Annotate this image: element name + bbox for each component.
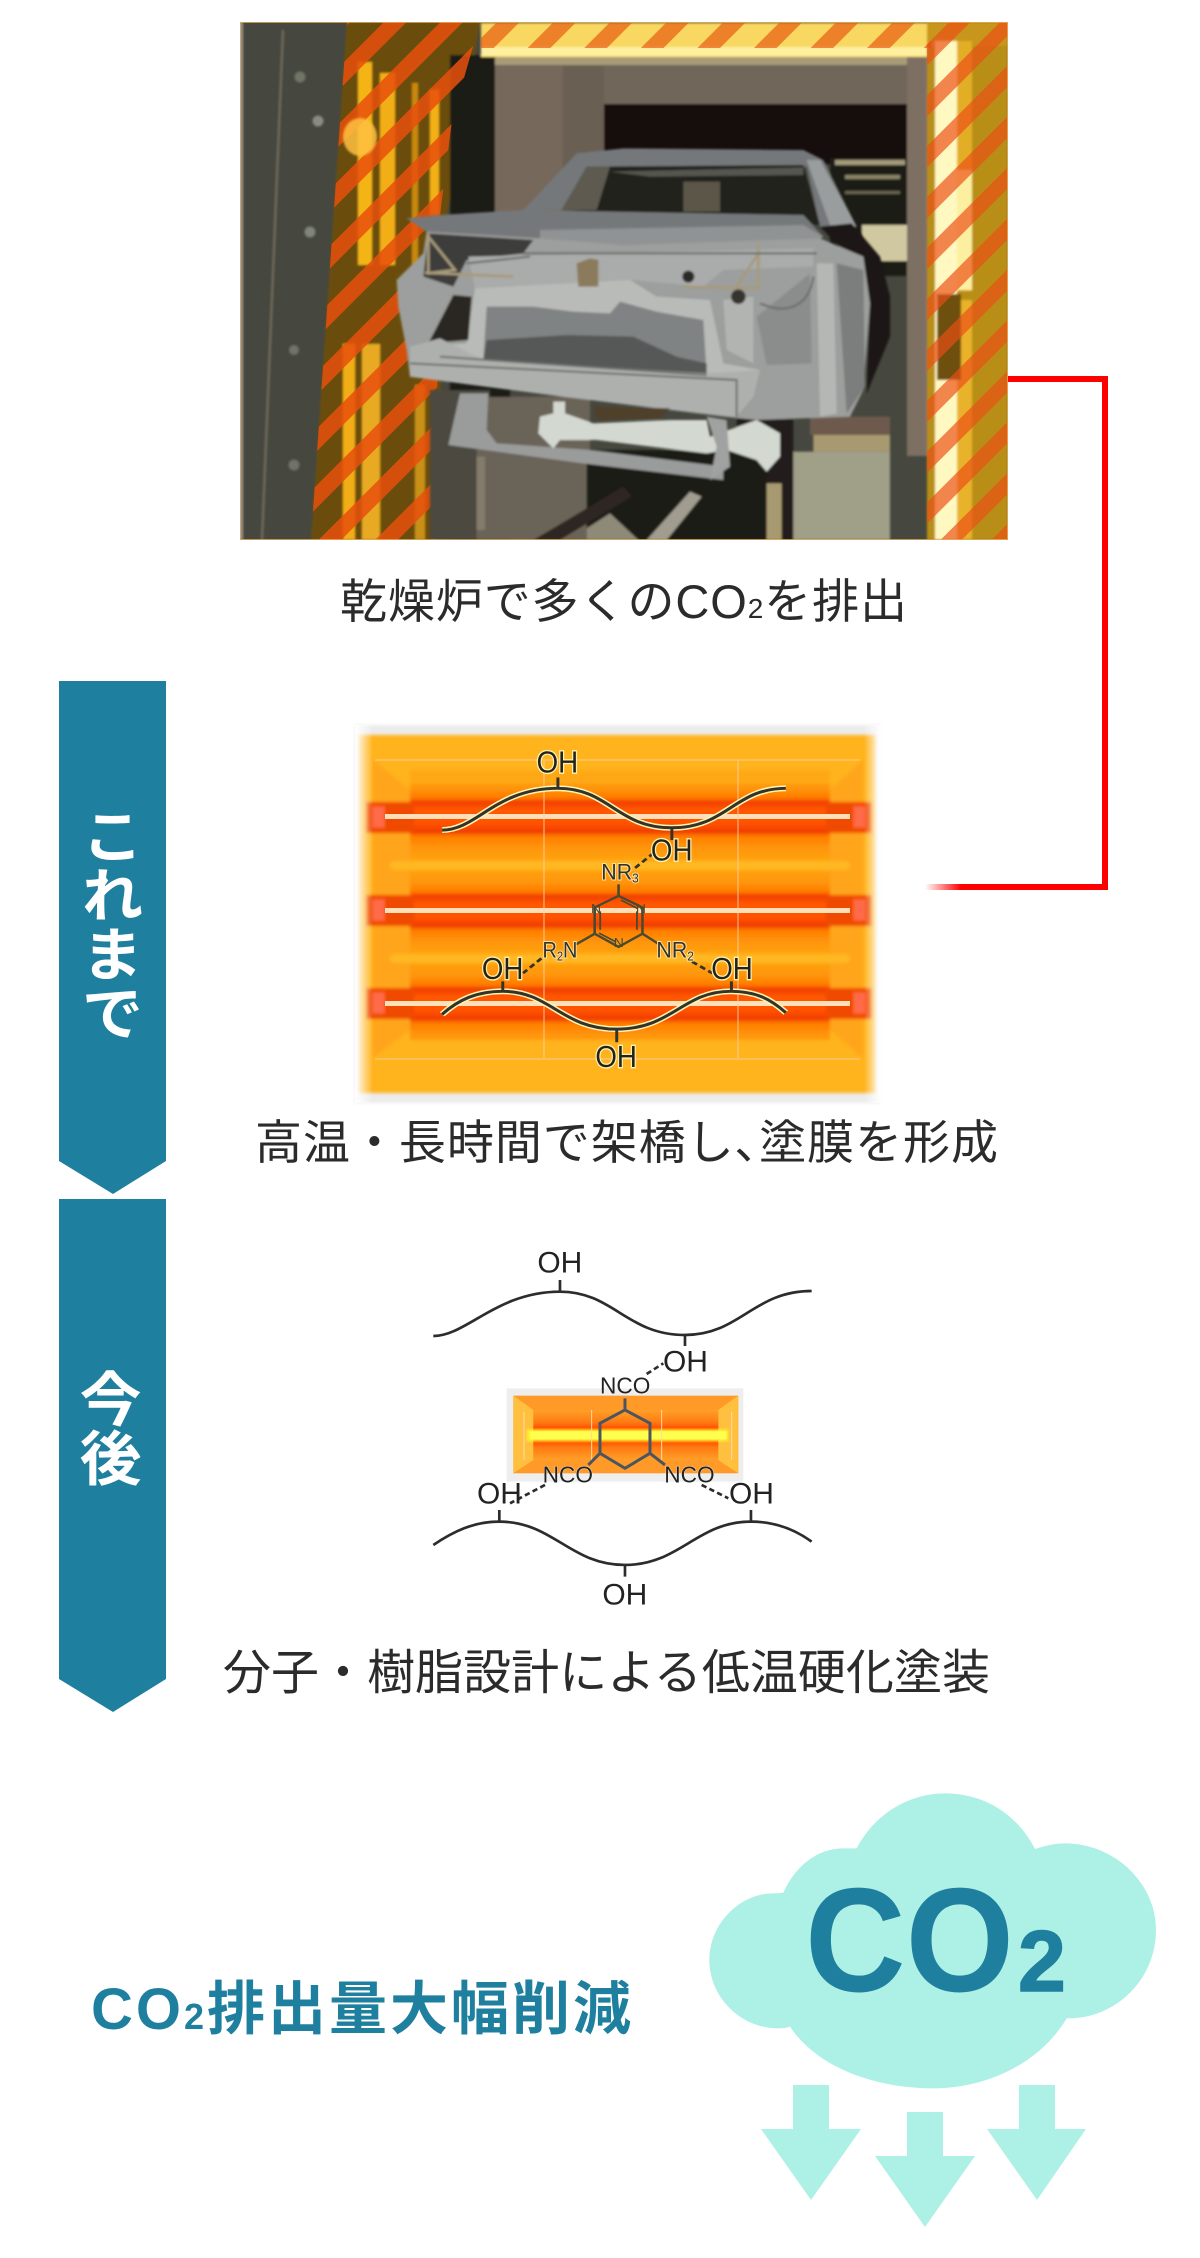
caption: drying oven: 乾燥炉で多くのCO2を排出 <box>340 575 907 628</box>
panel: high temperature heater with melamine crosslinking <box>355 725 881 1103</box>
molecule: resin chains and melamine crosslinker: R <box>542 939 561 963</box>
diagram: low temperature curing molecule: OH <box>663 1346 708 1379</box>
diagram: low temperature curing molecule: NCO <box>600 1372 650 1398</box>
diagram: low temperature curing molecule <box>433 1246 812 1611</box>
icon: CO2 cloud: 2 <box>1018 1914 1066 2010</box>
molecule: resin chains and melamine crosslinker: OH <box>711 951 753 985</box>
molecule: resin chains and melamine crosslinker <box>442 745 786 1074</box>
diagram: low temperature curing molecule: OH <box>537 1246 582 1279</box>
molecule: resin chains and melamine crosslinker: NR <box>656 939 693 963</box>
molecule: resin chains and melamine crosslinker: N <box>614 936 624 950</box>
molecule: resin chains and melamine crosslinker: N <box>636 902 646 916</box>
arrow band: これまで: これまで <box>73 806 143 1042</box>
molecule: resin chains and melamine crosslinker: N <box>563 939 577 963</box>
molecule: resin chains and melamine crosslinker: OH <box>537 745 578 779</box>
diagram: low temperature curing molecule: NCO <box>543 1462 593 1488</box>
heading: large CO2 reduction: CO2排出量大幅削減 <box>91 1977 631 2042</box>
molecule: resin chains and melamine crosslinker: 3 <box>632 871 639 886</box>
small heater panel <box>507 1388 743 1482</box>
molecule: resin chains and melamine crosslinker: OH <box>595 1040 637 1074</box>
molecule: resin chains and melamine crosslinker: N <box>591 902 601 916</box>
lamp glow <box>343 118 377 156</box>
caption: low temperature curing: 分子・樹脂設計による低温硬化塗装 <box>223 1647 990 1700</box>
arrow band: 今後: 今後 <box>71 1369 141 1487</box>
arrow band: 今後 <box>59 1199 166 1712</box>
diagram: low temperature curing molecule: OH <box>729 1477 774 1510</box>
molecule: resin chains and melamine crosslinker: 2 <box>557 949 563 964</box>
diagram: low temperature curing molecule: OH <box>477 1477 522 1510</box>
arrow band: これまで <box>59 681 166 1194</box>
molecule: resin chains and melamine crosslinker: OH <box>482 951 523 985</box>
photo: car body in drying oven <box>240 22 1008 540</box>
molecule: resin chains and melamine crosslinker: 2 <box>687 949 694 964</box>
caption: crosslinking at high temperature: 高温・長時間で架橋し、塗膜を形成 <box>255 1116 998 1169</box>
molecule: resin chains and melamine crosslinker: NR <box>601 861 637 885</box>
connector: red line from photo to heated panel <box>925 379 1105 890</box>
diagram: low temperature curing molecule: NCO <box>664 1462 715 1488</box>
diagram: low temperature curing molecule: OH <box>602 1578 647 1611</box>
icon: CO2 cloud: CO <box>805 1858 1014 2023</box>
molecule: resin chains and melamine crosslinker: OH <box>651 833 692 867</box>
icon: CO2 cloud <box>709 1793 1156 2088</box>
arrows: CO2 decreasing <box>761 2085 1086 2227</box>
stripes overlay <box>311 22 480 540</box>
car body <box>397 148 890 540</box>
